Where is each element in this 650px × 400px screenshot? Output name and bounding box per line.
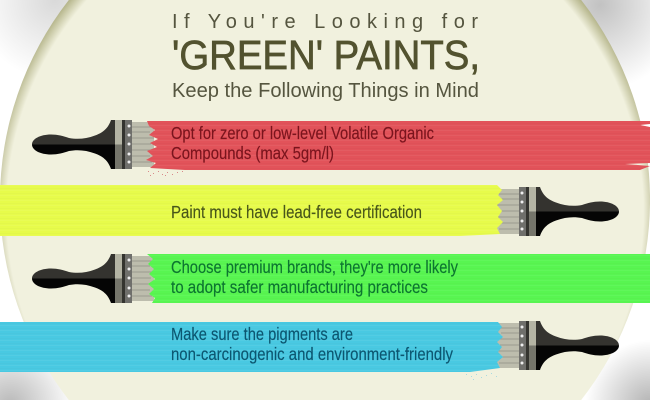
brush, left	[32, 120, 155, 169]
brush, left	[32, 254, 155, 303]
blue stroke text: Make sure the pigments are	[171, 324, 353, 344]
row 2: yellow paint stroke with brush	[0, 185, 619, 236]
green paint stroke	[147, 254, 650, 303]
yellow paint stroke	[0, 185, 503, 236]
blue stroke text	[171, 324, 453, 364]
green stroke text	[171, 257, 458, 297]
red stroke text	[171, 123, 434, 163]
title line 3: Keep the Following Things in Mind	[172, 80, 479, 102]
paint spatter	[466, 373, 497, 380]
row 1: red paint stroke with brush	[32, 120, 650, 176]
paint spatter	[148, 171, 183, 176]
row 3: green paint stroke with brush	[32, 254, 650, 303]
red stroke text: Opt for zero or low-level Volatile Organic	[171, 123, 434, 143]
green stroke text: Choose premium brands, they're more likely	[171, 257, 458, 277]
blue stroke text: non-carcinogenic and environment-friendly	[171, 344, 453, 364]
brush, right	[496, 187, 619, 236]
row 4: blue paint stroke with brush	[0, 321, 619, 380]
yellow stroke text: Paint must have lead-free certification	[171, 202, 422, 222]
green stroke text: to adopt safer manufacturing practices	[171, 277, 428, 297]
title line 1: If You're Looking for	[172, 11, 478, 33]
title line 2: 'GREEN' PAINTS,	[172, 32, 480, 78]
red stroke text: Compounds (max 5gm/l)	[171, 143, 334, 163]
brush, right	[496, 321, 619, 370]
title	[172, 11, 480, 102]
red paint stroke	[146, 121, 650, 170]
blue paint stroke	[0, 322, 503, 372]
